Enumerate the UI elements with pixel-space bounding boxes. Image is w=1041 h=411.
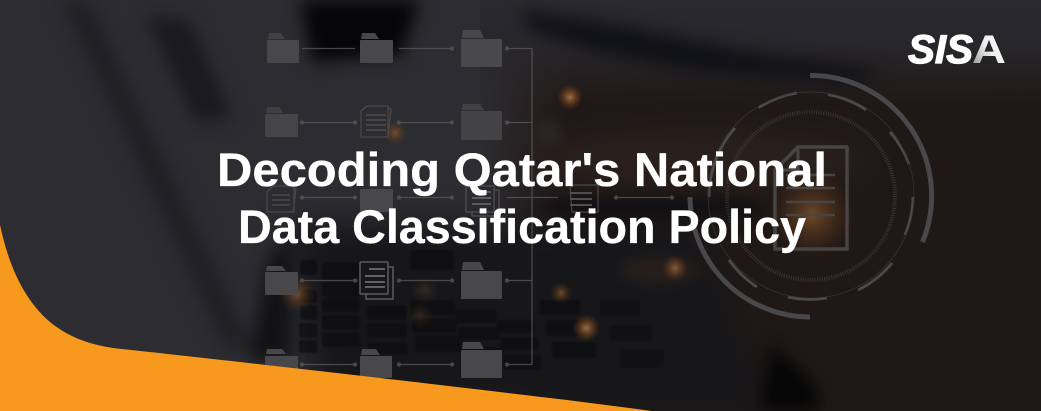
orange light glows xyxy=(279,84,856,342)
circular data emblem xyxy=(690,75,932,317)
logo: SISA: A xyxy=(972,28,1006,72)
folder flow diagram xyxy=(265,30,674,378)
title xyxy=(217,144,827,254)
folders xyxy=(265,30,502,378)
outer ring arcs xyxy=(690,75,932,317)
dashed middle ring xyxy=(709,93,913,299)
document icons xyxy=(267,106,598,299)
tick ring xyxy=(727,112,895,280)
connector lines xyxy=(300,47,674,366)
logo: SISA: SIS xyxy=(908,28,973,72)
document in ring xyxy=(775,147,847,249)
orange corner swoosh xyxy=(0,225,652,411)
keyboard keys xyxy=(299,250,664,369)
title: Decoding Qatar's National xyxy=(217,144,827,197)
title: Data Classification Policy xyxy=(238,201,807,254)
logo: SISA xyxy=(908,28,1006,72)
